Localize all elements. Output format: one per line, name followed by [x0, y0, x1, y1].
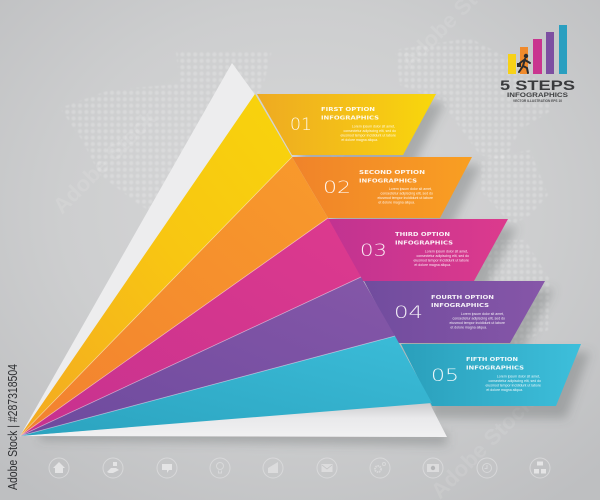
body text: et dolore magna aliqua.	[450, 326, 487, 330]
panel: option 4 banner: INFOGRAPHICS	[431, 303, 489, 309]
layer: orange	[20, 157, 328, 436]
body text	[450, 312, 505, 330]
icon row	[49, 458, 550, 478]
watermark: Adobe Stock	[236, 140, 349, 254]
number: 05	[431, 366, 459, 386]
body text: eiusmod tempor incididunt ut labore	[486, 384, 541, 388]
layer: purple	[20, 277, 395, 436]
number: 04	[394, 303, 423, 323]
icon: rising chart	[263, 458, 283, 478]
body text	[486, 374, 541, 392]
banner shape	[401, 344, 581, 406]
body text: consectetur adipiscing elit, sed do	[488, 379, 541, 383]
body text: eiusmod tempor incididunt ut labore	[341, 134, 396, 138]
body text: eiusmod tempor incididunt ut labore	[378, 196, 433, 200]
number: 01	[290, 115, 312, 135]
body text: eiusmod tempor incididunt ut labore	[414, 258, 469, 262]
logo caption: VECTOR ILLUSTRATION EPS 10	[513, 99, 562, 103]
body text: consectetur adipiscing elit, sed do	[343, 129, 396, 133]
layer: yellow	[20, 94, 292, 436]
banner shape	[257, 94, 436, 155]
heading: FOURTH OPTION	[431, 295, 494, 301]
body text: et dolore magna aliqua.	[414, 263, 451, 267]
layer: magenta	[20, 218, 361, 436]
body text: et dolore magna aliqua.	[378, 200, 415, 204]
panel: option 2 banner	[292, 157, 472, 218]
body text: Lorem ipsum dolor sit amet,	[389, 187, 432, 191]
stock id label: Adobe Stock | #287318504	[5, 364, 20, 490]
body text: eiusmod tempor incididunt ut labore	[450, 321, 505, 325]
number: 03	[360, 241, 387, 261]
panel: option 1 banner: INFOGRAPHICS	[321, 116, 379, 122]
icon: light bulb	[210, 458, 230, 478]
banner shape	[364, 281, 545, 343]
icon: speech bubble	[157, 458, 177, 478]
number: 02	[323, 178, 351, 198]
panel: option 1 banner	[257, 94, 436, 155]
logo title: 5 STEPS	[500, 78, 575, 93]
layer: teal	[20, 336, 432, 436]
body text: consectetur adipiscing elit, sed do	[380, 192, 433, 196]
watermark: Adobe Stock	[248, 305, 361, 419]
body text: consectetur adipiscing elit, sed do	[452, 316, 505, 320]
body text	[378, 187, 433, 204]
heading: THIRD OPTION	[395, 232, 450, 238]
panel: option 3 banner	[328, 219, 508, 281]
icon: home	[49, 458, 69, 478]
white bottom wedge	[20, 402, 447, 437]
watermark: Adobe Stock	[48, 105, 161, 219]
panel: option 3 banner: INFOGRAPHICS	[395, 240, 453, 246]
world map dots	[60, 38, 552, 345]
logo subtitle: INFOGRAPHICS	[507, 93, 568, 99]
body text: Lorem ipsum dolor sit amet,	[497, 374, 540, 378]
banner shadows	[40, 102, 590, 445]
body text: Lorem ipsum dolor sit amet,	[425, 250, 468, 254]
body text	[341, 124, 396, 142]
body text: et dolore magna aliqua.	[486, 388, 523, 392]
icon: envelope	[317, 458, 337, 478]
body text: consectetur adipiscing elit, sed do	[416, 254, 469, 258]
icon: running businessman	[517, 54, 530, 73]
panel: option 5 banner: INFOGRAPHICS	[466, 366, 524, 372]
icon: hand and plant	[103, 458, 123, 478]
panel: option 5 banner	[401, 344, 581, 406]
icon: clock	[477, 458, 497, 478]
panel: option 2 banner: INFOGRAPHICS	[359, 178, 417, 184]
panel: option 4 banner	[364, 281, 545, 343]
body text: et dolore magna aliqua.	[341, 138, 378, 142]
icon: camera	[423, 458, 443, 478]
logo: 5 steps	[500, 25, 575, 103]
heading: SECOND OPTION	[359, 170, 425, 176]
body text	[414, 250, 469, 267]
body text: Lorem ipsum dolor sit amet,	[352, 124, 395, 128]
bar chart	[508, 25, 567, 74]
panel: layered pyramid	[20, 94, 432, 436]
white top wedge	[20, 63, 256, 436]
heading: FIRST OPTION	[321, 107, 375, 113]
panel: white back layer	[20, 63, 447, 437]
banner shape	[292, 157, 472, 218]
heading: FIFTH OPTION	[466, 357, 518, 363]
body text: Lorem ipsum dolor sit amet,	[461, 312, 504, 316]
icon: org chart	[530, 458, 550, 478]
banner shape	[328, 219, 508, 281]
icon: gears	[370, 458, 390, 478]
